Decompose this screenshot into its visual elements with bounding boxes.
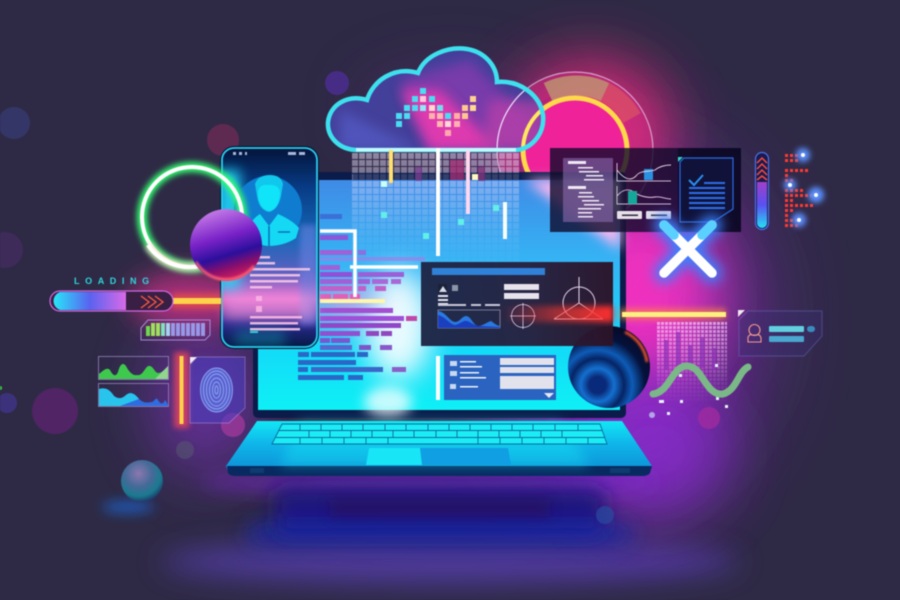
neon drip lines [389,148,507,400]
dark sphere [568,326,650,408]
dark dashboard panel [550,148,741,232]
neon vertical bar [174,352,189,428]
loading label: LOADING [74,276,155,286]
cloud pixel wave [396,88,476,136]
battery indicator [141,320,210,340]
fingerprint card [190,357,245,423]
laptop base [226,421,652,476]
pixel grid under cloud [352,153,521,265]
fingerprint [200,368,232,412]
user icon [748,324,761,342]
red dot matrix [784,148,824,227]
yellow neon line right [620,308,726,320]
red flare [500,306,613,322]
neon X [664,225,712,273]
vertical slider [756,152,768,230]
trackpad [366,448,511,465]
area chart [438,310,500,328]
screen dashboard panel [421,262,613,346]
small teal sphere [102,460,163,513]
cloud [324,45,546,153]
laptop shadow [245,489,635,546]
phone status bar [233,152,305,155]
green neon ring [142,167,242,267]
laptop screen [253,172,626,418]
purple sphere [190,209,262,281]
phone [218,146,319,349]
radial icon [554,277,603,319]
green wave [653,366,748,394]
decorative bokeh circles [0,71,720,459]
user profile card [738,310,822,356]
code lines on screen [298,214,425,380]
checklist document [678,157,733,222]
document lists [563,158,613,222]
crosshair icon [510,303,536,329]
lower screen panel [444,355,556,400]
screen glow [315,180,620,417]
line charts [617,163,671,204]
neon code connectors [320,231,418,303]
keyboard [272,424,607,444]
small green spark [0,386,2,390]
avatar [234,175,302,246]
pixel data graph [649,322,728,418]
green area chart [98,356,168,380]
phone text lines [250,256,310,333]
phone pink band [224,292,315,320]
big segmented ring [497,72,653,228]
buttons [617,211,671,219]
blue area chart [98,384,168,406]
loading bar [50,291,221,311]
